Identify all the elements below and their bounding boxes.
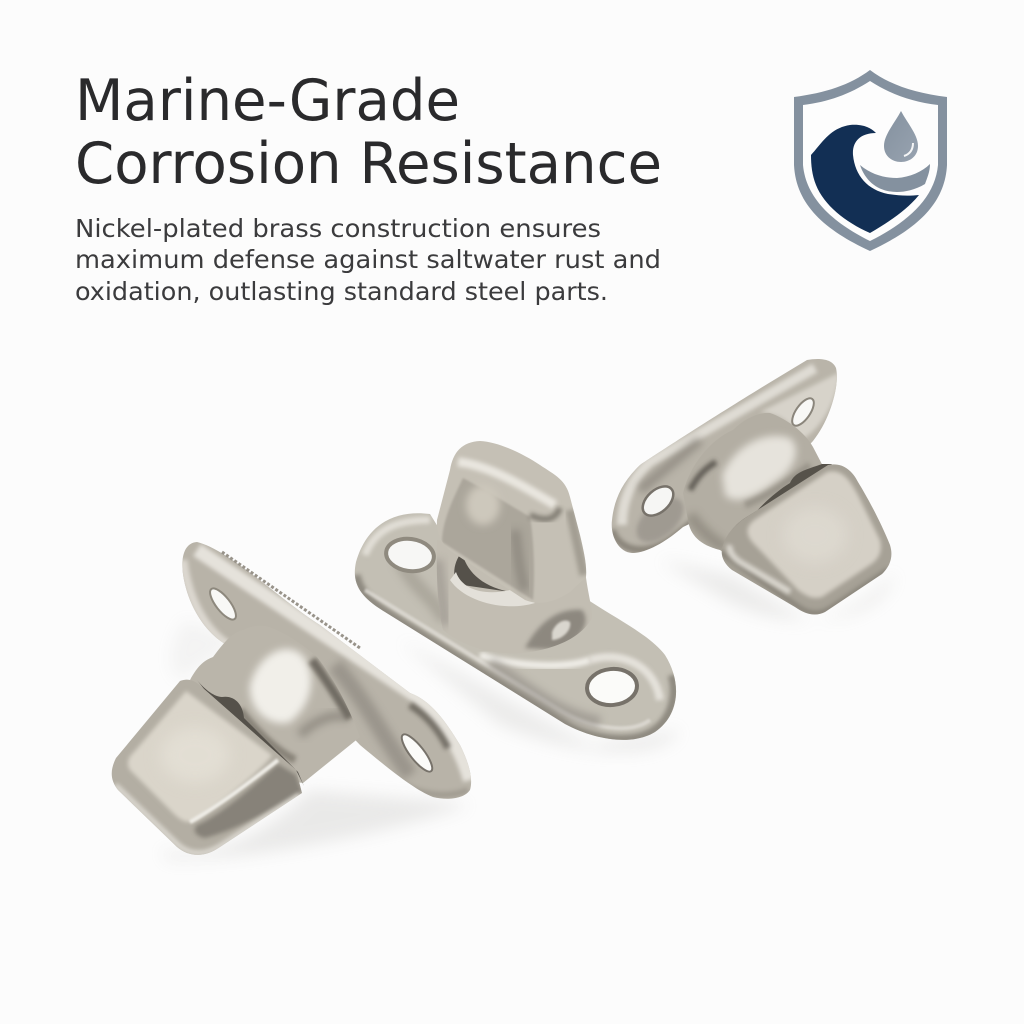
shadows under the parts — [160, 560, 895, 860]
description text: Nickel-plated brass construction ensures — [75, 214, 601, 243]
description text — [75, 214, 661, 306]
title: Corrosion Resistance — [75, 131, 662, 197]
description text: maximum defense against saltwater rust and — [75, 245, 661, 274]
icon: shield with wave and water drop — [794, 70, 947, 251]
right post — [684, 413, 822, 552]
title: Marine-Grade — [75, 68, 460, 134]
part: left fastener — [105, 535, 475, 865]
right slot — [724, 464, 832, 548]
part: centre fastener — [354, 441, 676, 740]
left post — [190, 638, 356, 783]
centre post — [436, 557, 590, 651]
right head — [722, 464, 892, 614]
right plate — [612, 359, 837, 553]
description text: oxidation, outlasting standard steel parts. — [75, 277, 608, 306]
centre head — [436, 441, 586, 602]
part: right fastener — [612, 359, 892, 614]
left plate — [175, 535, 475, 805]
left slot — [197, 680, 304, 786]
title — [75, 68, 662, 197]
left head — [112, 680, 302, 855]
centre slot — [454, 552, 510, 592]
centre plate — [354, 513, 676, 740]
